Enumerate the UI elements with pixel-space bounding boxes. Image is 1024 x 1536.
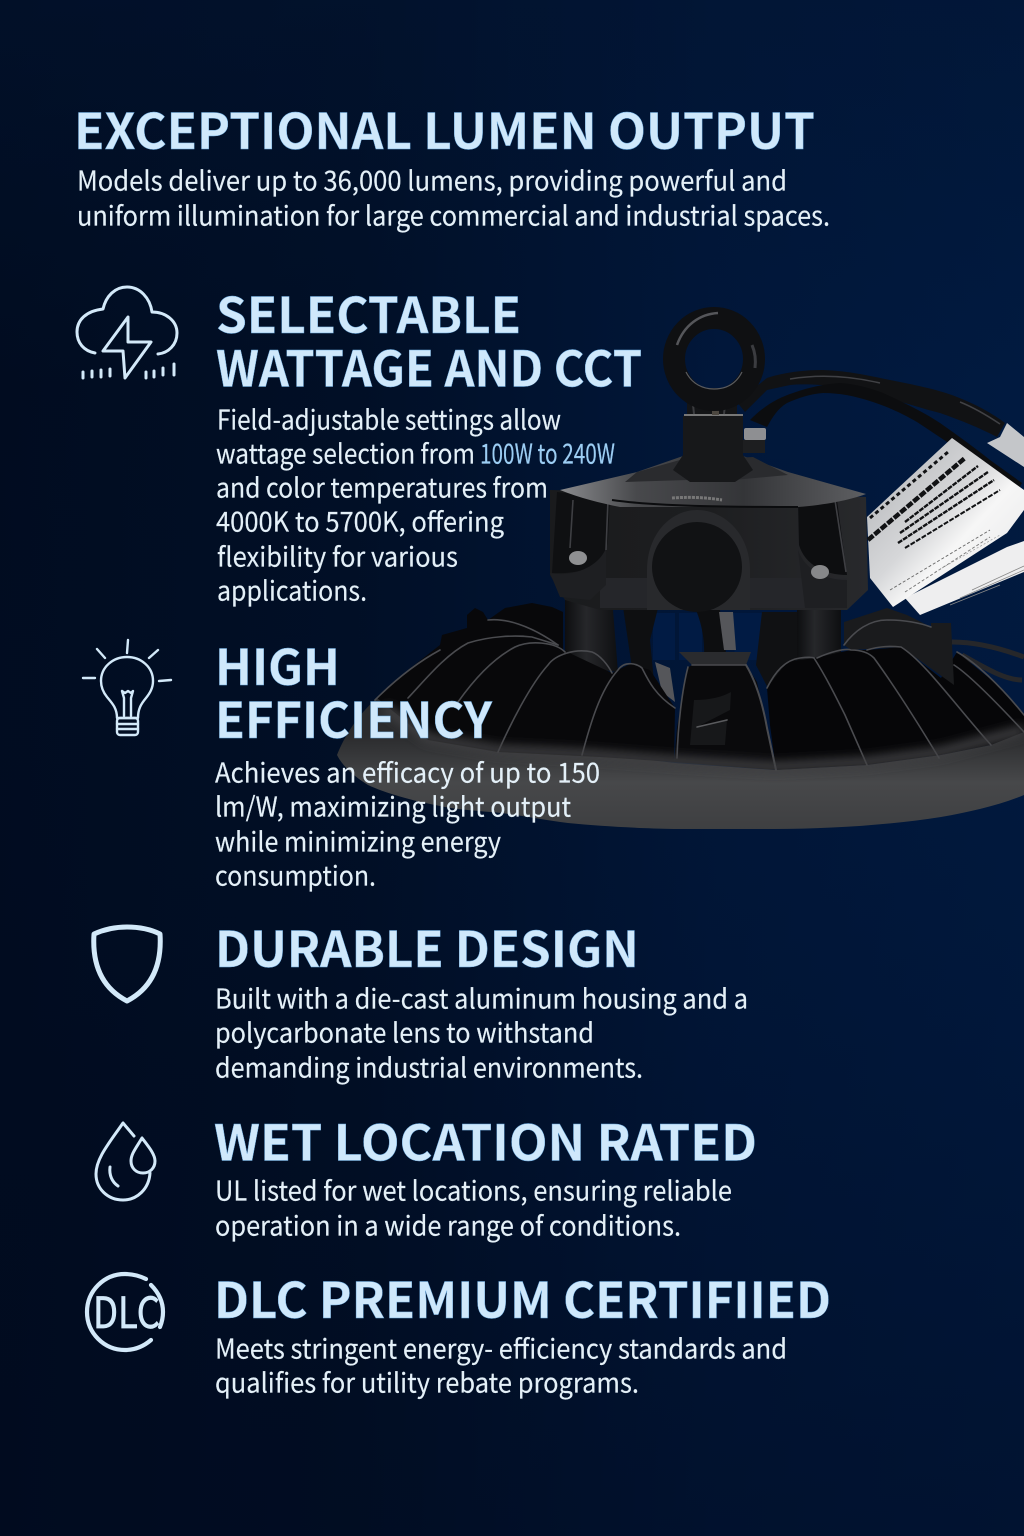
- description: wattage selection from: [216, 432, 475, 472]
- collar and neck: [673, 388, 766, 482]
- eye bolt: [674, 313, 755, 400]
- heading: EXCEPTIONAL LUMEN OUTPUT: [74, 93, 815, 164]
- heading: [216, 277, 642, 402]
- heading: SELECTABLE: [216, 277, 521, 348]
- instruction tags: [867, 438, 1024, 615]
- description: [77, 160, 830, 234]
- heading: DURABLE DESIGN: [215, 911, 639, 982]
- icon: DLC badge: [87, 1274, 163, 1350]
- icon: water drops: [96, 1123, 155, 1200]
- wires and tape: [737, 370, 1024, 492]
- description: Built with a die-cast aluminum housing and a: [215, 978, 748, 1016]
- section: dlc premium certified: [87, 1262, 831, 1400]
- description: and color temperatures from: [216, 466, 548, 506]
- description: while minimizing energy: [215, 820, 501, 860]
- section: high efficiency: [83, 629, 600, 894]
- description: [215, 978, 748, 1086]
- section: durable design: [94, 911, 748, 1086]
- description: Achieves an efficacy of up to 150: [215, 752, 600, 790]
- description: 100W to 240W: [480, 432, 615, 472]
- disc top blend: [385, 708, 1024, 767]
- icon: cloud with lightning: [77, 287, 177, 378]
- description: [215, 752, 600, 894]
- description: operation in a wide range of conditions.: [215, 1204, 681, 1244]
- description: uniform illumination for large commercial and industrial spaces.: [77, 194, 830, 234]
- description: demanding industrial environments.: [215, 1046, 643, 1086]
- description: lm/W, maximizing light output: [215, 786, 571, 824]
- heading: [215, 629, 493, 753]
- section: selectable wattage and cct: [77, 277, 642, 608]
- icon: light bulb: [83, 640, 171, 735]
- icon: shield: [94, 927, 160, 1001]
- description: flexibility for various: [217, 536, 458, 574]
- legs and centre stem: [565, 598, 841, 702]
- description: Meets stringent energy- efficiency standards and: [215, 1328, 787, 1366]
- base disc: [337, 698, 1024, 829]
- heat sink fins: [375, 603, 1024, 770]
- icon: DLC badge: DLC: [93, 1279, 160, 1341]
- description: 4000K to 5700K, offering: [216, 500, 504, 540]
- fin ribs: [375, 620, 1024, 770]
- product photo: high bay light: [337, 313, 1024, 829]
- description: [215, 1170, 732, 1244]
- heading: WET LOCATION RATED: [214, 1104, 757, 1176]
- heading: WATTAGE AND CCT: [216, 330, 642, 402]
- side wires: [952, 642, 1024, 680]
- description: [216, 398, 615, 608]
- description: Field-adjustable settings allow: [217, 398, 561, 438]
- description: Models deliver up to 36,000 lumens, providing powerful and: [77, 160, 787, 198]
- heading: HIGH: [215, 629, 340, 700]
- section: exceptional lumen output: [74, 93, 830, 234]
- description: [215, 1328, 787, 1400]
- description: qualifies for utility rebate programs.: [215, 1362, 639, 1400]
- description: consumption.: [215, 854, 376, 894]
- description: UL listed for wet locations, ensuring reliable: [215, 1170, 732, 1208]
- description: applications.: [217, 570, 367, 608]
- section: wet location rated: [96, 1104, 757, 1244]
- heading: DLC PREMIUM CERTIFIIED: [214, 1262, 831, 1333]
- heading: EFFICIENCY: [215, 682, 493, 753]
- driver housing: [550, 456, 868, 612]
- description: polycarbonate lens to withstand: [215, 1012, 594, 1050]
